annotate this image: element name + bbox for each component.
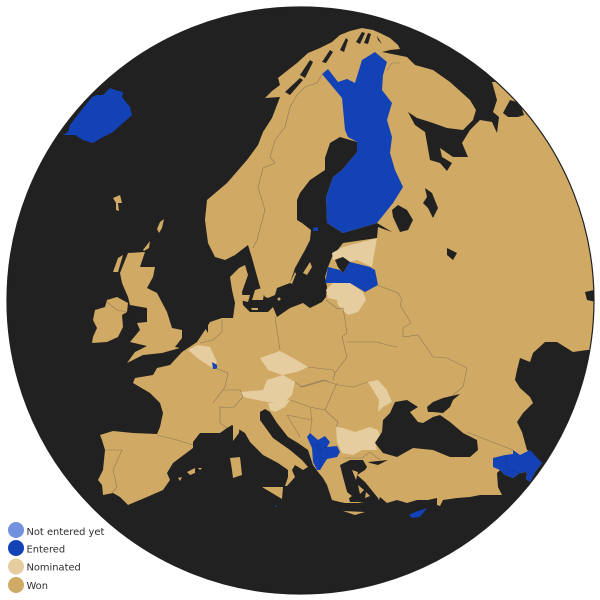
region: mainland Europe (won): [98, 28, 600, 506]
seas and lakes: Black Sea, Azov, Marmara, Aegean, Ladoga, Onega, fjords: [206, 32, 594, 503]
internal Balkan and Caucasus lines: [313, 440, 520, 473]
legend item: not entered yet: Not entered yet: [26, 527, 104, 538]
legend: [8, 522, 104, 593]
legend item: entered: Entered: [26, 544, 65, 556]
legend item: won: Won: [26, 581, 48, 592]
region: nominated countries: [188, 238, 392, 455]
region: entered countries: [63, 52, 542, 518]
region: Ireland, UK and other won islands: [92, 195, 370, 515]
borders between countries: [105, 63, 513, 493]
legend item: nominated: Nominated: [26, 562, 81, 574]
